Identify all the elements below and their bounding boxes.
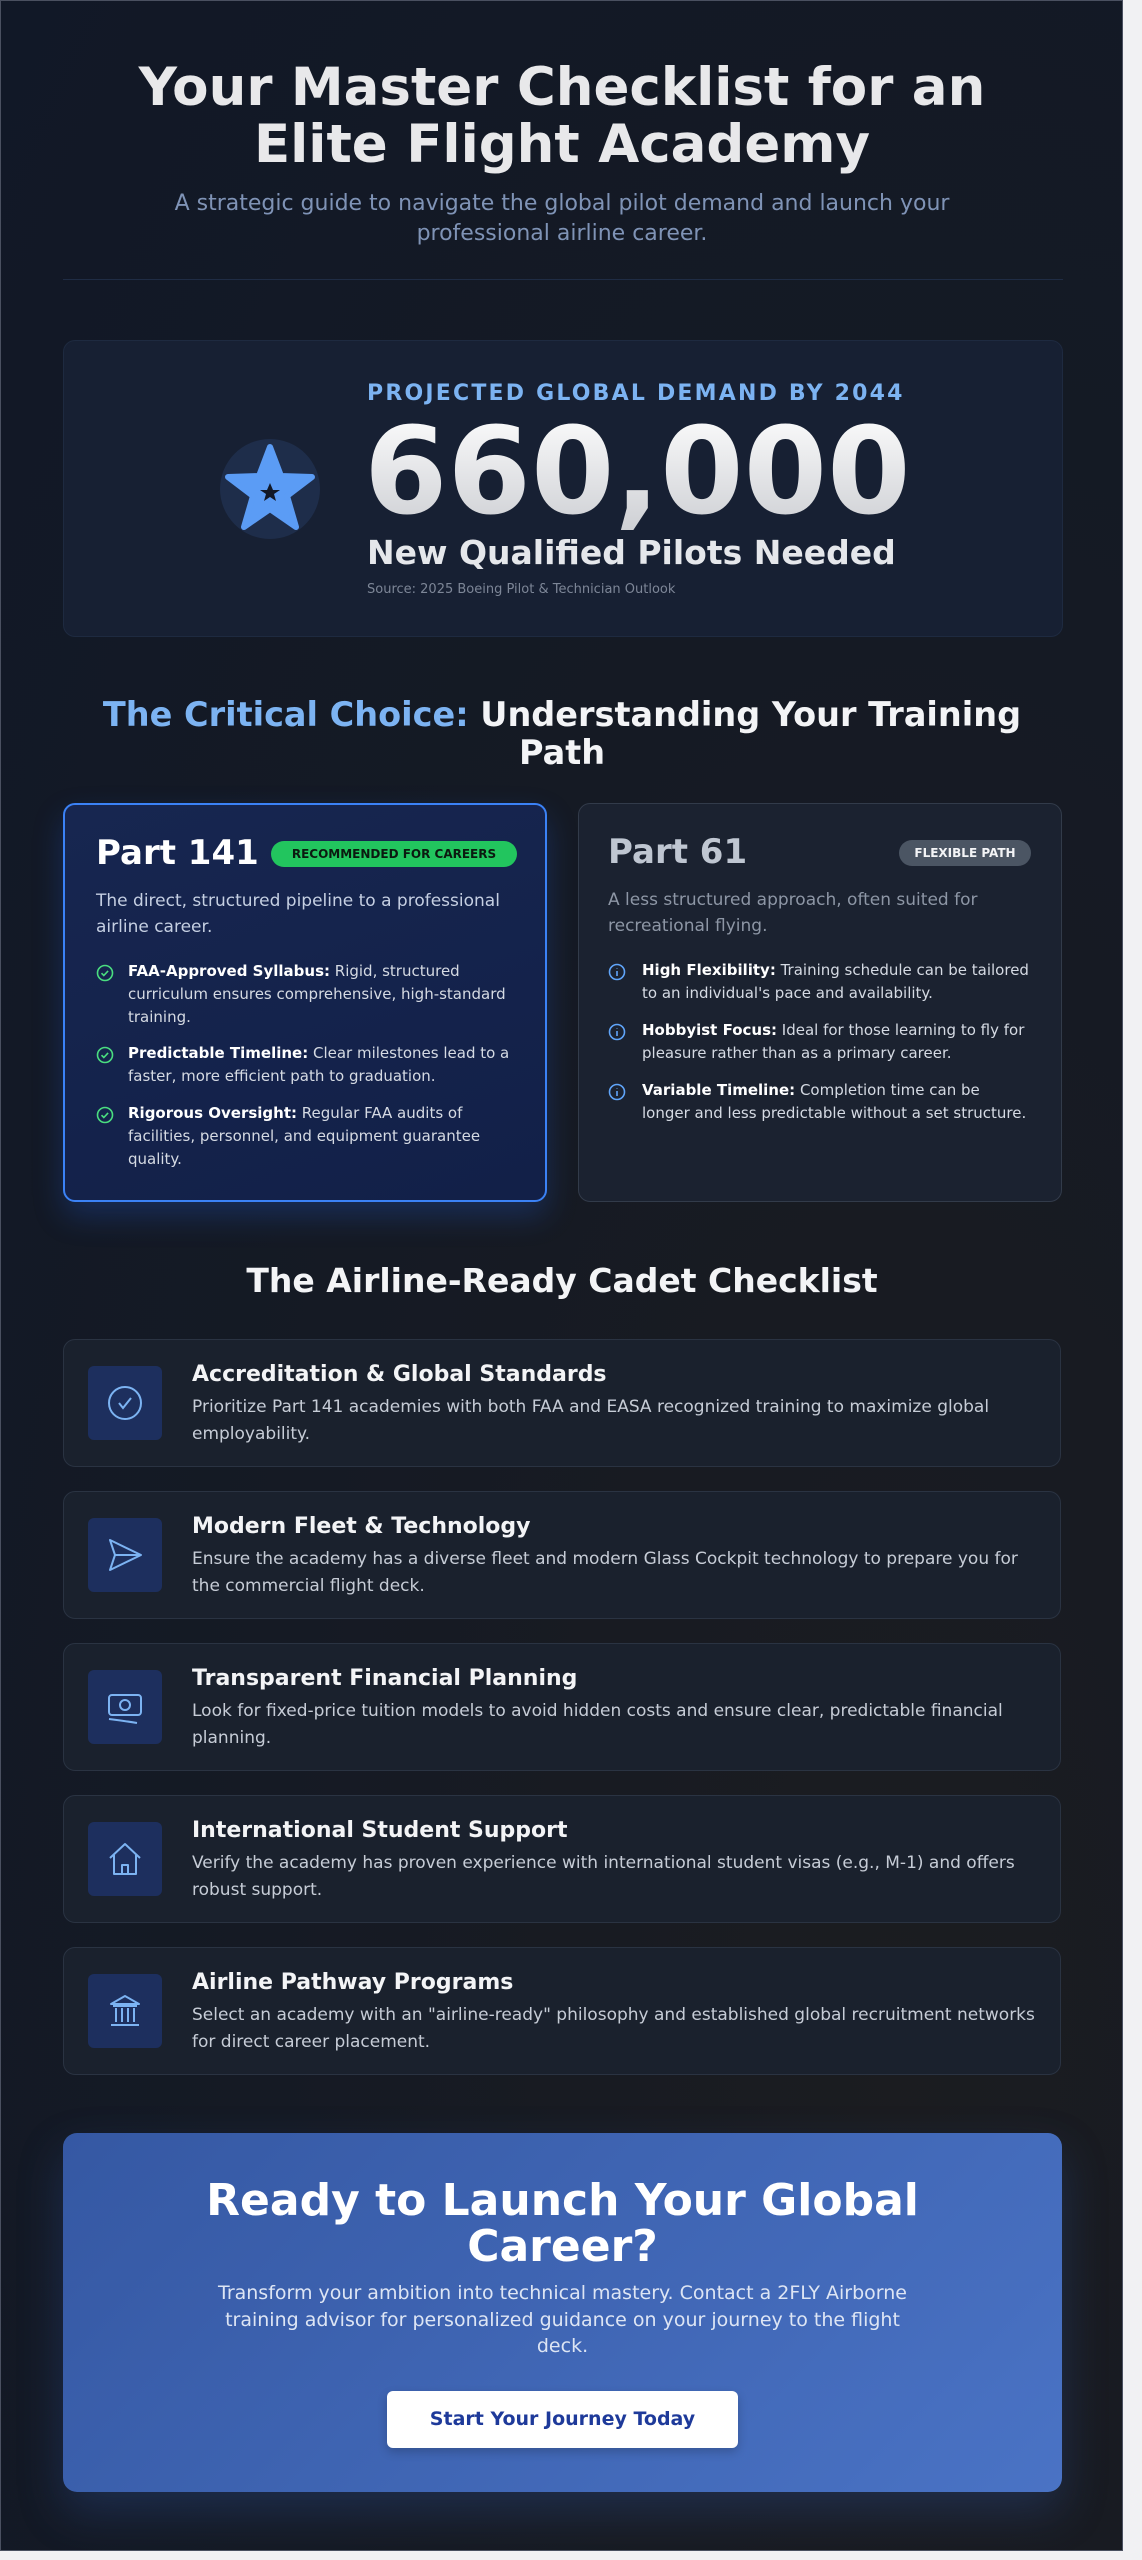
icon: check circle [88, 1366, 162, 1440]
heading part 61: Part 61 [608, 832, 747, 872]
checklist item 2 [63, 1491, 1061, 1619]
big number: 660,000 [364, 403, 911, 542]
bullet 3: Variable Timeline: Completion time can be [642, 1081, 980, 1099]
checklist item 3 [63, 1643, 1061, 1771]
description: A less structured approach, often suited for recreational flying. [608, 890, 977, 936]
stat caption: New Qualified Pilots Needed [367, 533, 896, 572]
checklist item 4: International Student Support [192, 1818, 568, 1843]
bullet 2: Predictable Timeline: Clear milestones lead to a faster, more efficient path to graduation. [128, 1044, 509, 1085]
icon: house [88, 1822, 162, 1896]
title: Elite Flight Academy [254, 114, 870, 175]
icon: paper plane [88, 1518, 162, 1592]
checklist item 1 [63, 1339, 1061, 1467]
checklist item 5: Airline Pathway Programs [192, 1970, 513, 1995]
checklist item 1: Accreditation & Global Standards [192, 1362, 607, 1387]
badge flexible: FLEXIBLE PATH [914, 846, 1016, 860]
subtitle: A strategic guide to navigate the global pilot demand and launch your professional airline career. [175, 191, 949, 246]
checklist item 3: Look for fixed-price tuition models to avoid hidden costs and ensure clear, predictable financial planning. [192, 1701, 1003, 1748]
CTA heading: Career? [467, 2221, 658, 2272]
bullet 3: longer and less predictable without a set structure. [642, 1104, 1026, 1122]
checklist item 5: Select an academy with an "airline-ready" philosophy and established global recruitment networks for direct career placement. [192, 2005, 1035, 2052]
icon: money [88, 1670, 162, 1744]
badge recommended [271, 841, 517, 867]
icon: institution [88, 1974, 162, 2048]
CTA heading: Ready to Launch Your Global [206, 2175, 919, 2226]
CTA button: Start Your Journey Today [430, 2408, 695, 2430]
panel: part 141 [63, 803, 547, 1202]
checklist item 4 [63, 1795, 1061, 1923]
checklist item 3: Transparent Financial Planning [192, 1666, 577, 1691]
stat label: PROJECTED GLOBAL DEMAND BY 2044 [367, 381, 905, 406]
section heading: checklist: The Airline-Ready Cadet Checklist [246, 1261, 878, 1300]
checklist item 5 [63, 1947, 1061, 2075]
source: Source: 2025 Boeing Pilot & Technician Outlook [367, 582, 675, 597]
section heading: critical choice: The Critical Choice: Understanding Your Training Path [103, 695, 1021, 772]
checklist item 2: Modern Fleet & Technology [192, 1514, 531, 1539]
bullet 3 [608, 1081, 1026, 1122]
title [138, 57, 985, 175]
bullet 2: Hobbyist Focus: Ideal for those learning to fly for pleasure rather than as a primary career. [642, 1021, 1024, 1062]
checklist item 1: Prioritize Part 141 academies with both FAA and EASA recognized training to maximize global employability. [192, 1397, 989, 1444]
checklist item 2: Ensure the academy has a diverse fleet and modern Glass Cockpit technology to prepare you for the commercial flight deck. [192, 1549, 1018, 1596]
icon: star [220, 439, 320, 539]
panel: part 61 [578, 803, 1062, 1202]
CTA heading [206, 2175, 919, 2272]
title: Your Master Checklist for an [139, 57, 985, 118]
CTA panel [63, 2133, 1062, 2492]
description: The direct, structured pipeline to a professional airline career. [96, 891, 500, 937]
bullet 3: Rigorous Oversight: Regular FAA audits of facilities, personnel, and equipment guarantee quality. [128, 1104, 480, 1168]
checklist item 4: Verify the academy has proven experience with international student visas (e.g., M-1) and offers robust support. [192, 1853, 1015, 1900]
CTA text: Transform your ambition into technical mastery. Contact a 2FLY Airborne training advisor for personalized guidance on your journey to the flight deck. [218, 2282, 907, 2357]
badge recommended: RECOMMENDED FOR CAREERS [292, 847, 496, 861]
CTA button [387, 2391, 738, 2448]
heading part 141: Part 141 [96, 833, 259, 873]
stat panel [63, 340, 1063, 637]
bullet 1: FAA-Approved Syllabus: Rigid, structured curriculum ensures comprehensive, high-standard training. [128, 962, 506, 1026]
badge flexible [899, 840, 1031, 866]
bullet 1: High Flexibility: Training schedule can be tailored to an individual's pace and availability. [642, 961, 1029, 1002]
